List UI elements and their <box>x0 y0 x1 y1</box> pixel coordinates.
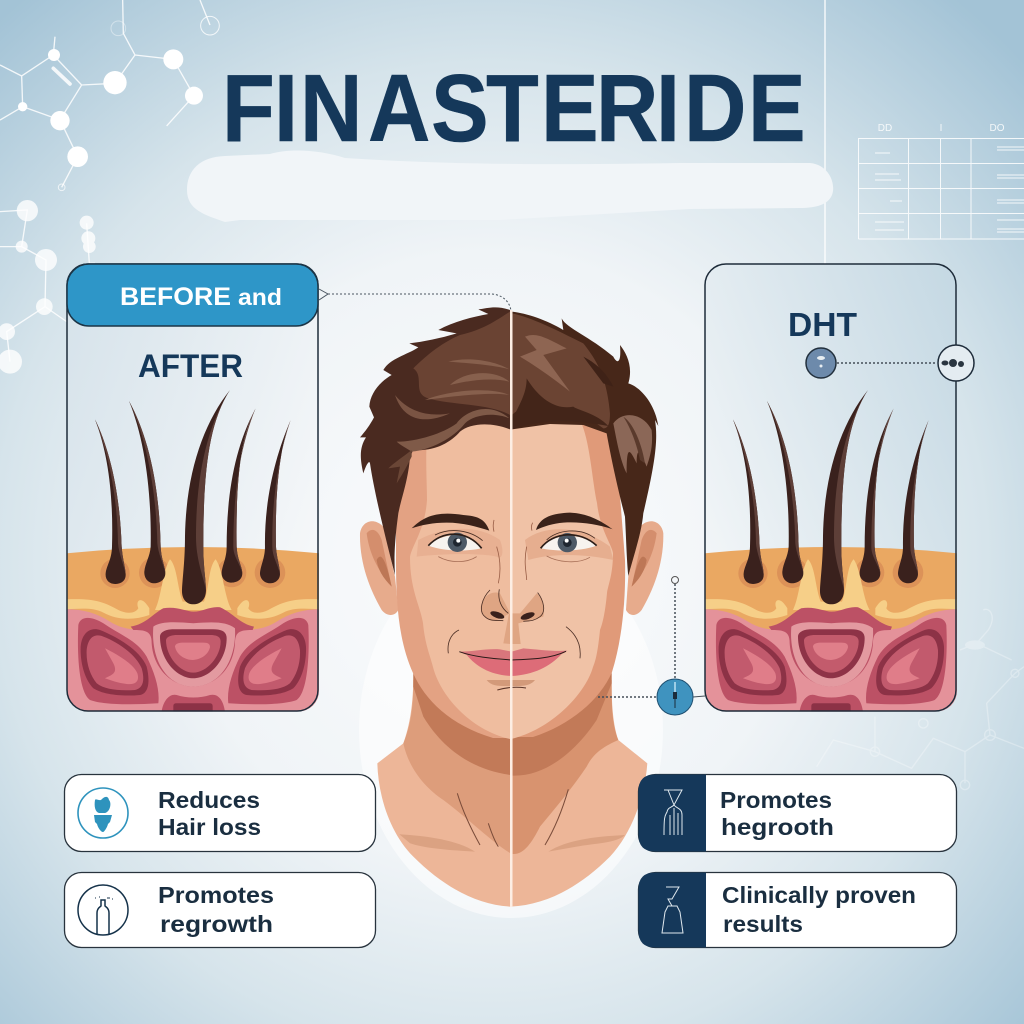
receptor node <box>938 345 974 381</box>
icon: spray bottle <box>662 887 683 933</box>
panel: before and after <box>67 264 319 712</box>
panel: DHT <box>705 264 974 712</box>
scalp cross-section: right <box>705 390 957 712</box>
face shape <box>396 400 511 738</box>
subtitle placeholder blob <box>187 151 833 222</box>
background data table: I <box>940 123 942 134</box>
card: promotes regrowth <box>64 872 376 948</box>
icon: follicle outline <box>664 790 682 835</box>
face highlight <box>410 420 511 739</box>
DHT molecule node <box>806 348 937 378</box>
connector: before tab to hair <box>319 289 511 311</box>
card: promotes hegrooth: Promotes <box>720 787 832 813</box>
card: reduces hair loss: Reduces <box>158 787 260 813</box>
connector node: lower right <box>598 576 705 715</box>
features <box>412 513 613 583</box>
before tab: and <box>238 284 282 310</box>
title: FINASTERIDE <box>222 55 806 162</box>
card: reduces hair loss <box>64 774 376 852</box>
icon: follicle <box>78 788 128 838</box>
hair <box>360 307 658 576</box>
ears <box>360 521 663 615</box>
card: reduces hair loss: Hair loss <box>158 814 261 840</box>
before tab <box>67 264 318 326</box>
card: promotes hegrooth: hegrooth <box>721 814 834 840</box>
background data table: DD <box>878 123 892 134</box>
card: promotes regrowth: Promotes <box>158 882 274 908</box>
icon: bottle <box>78 885 128 935</box>
bust and neck <box>377 670 647 907</box>
molecule: bottom right <box>817 609 1024 790</box>
card: clinically proven results <box>638 872 956 948</box>
white halo behind bust <box>359 542 663 918</box>
DHT label: DHT <box>788 306 857 343</box>
background data table: DO <box>990 123 1005 134</box>
after label: AFTER <box>138 348 243 384</box>
scalp cross-section: left <box>67 390 319 712</box>
card: promotes regrowth: regrowth <box>160 911 273 937</box>
centre dividing line <box>510 310 512 907</box>
background data table <box>825 0 1024 264</box>
before tab: BEFORE <box>120 283 231 311</box>
card: clinically proven results: results <box>723 911 803 937</box>
card: clinically proven results: Clinically proven <box>722 882 916 908</box>
card: promotes hegrooth <box>638 774 956 852</box>
molecule: top left <box>0 0 219 374</box>
central face illustration <box>359 307 663 918</box>
